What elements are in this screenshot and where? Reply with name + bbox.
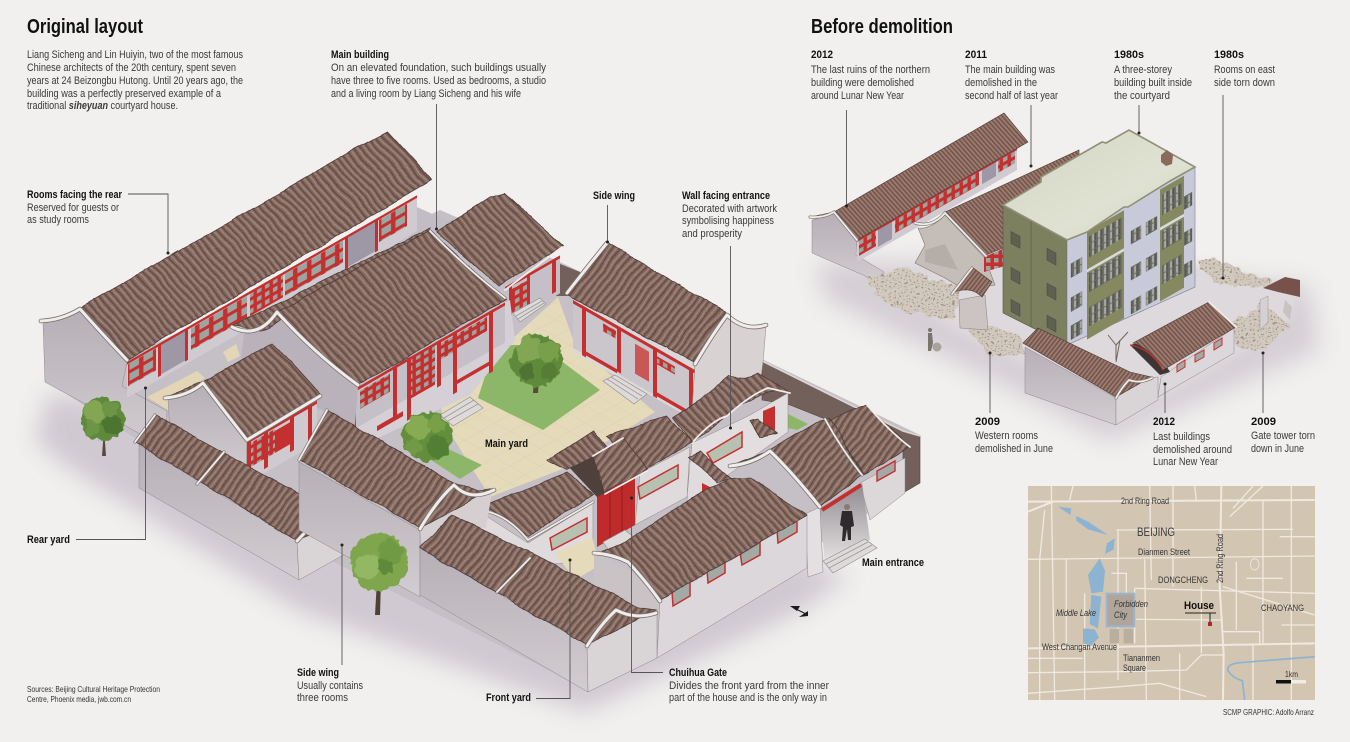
rooftop chimney — [1161, 150, 1173, 166]
callout: 1980s three-storey building: A three-storey — [1114, 64, 1172, 76]
tree: beside main yard — [402, 411, 452, 461]
callout: side wing lower — [297, 544, 363, 704]
callout: main building — [331, 49, 546, 230]
main building left gable wall — [240, 314, 358, 425]
upper gate roof — [547, 430, 607, 470]
callout: rooms facing the rear: as study rooms — [27, 214, 89, 226]
gate shadow — [567, 455, 605, 497]
callout: front yard: Front yard — [486, 692, 531, 704]
panel: before demolition illustration — [810, 113, 1320, 442]
brown boundary wall — [555, 262, 920, 493]
building: east side wing — [567, 242, 766, 420]
map labels: 2nd Ring Road — [1121, 496, 1169, 507]
middle hall gable wall — [168, 385, 247, 478]
small lawn behind gate — [788, 414, 808, 430]
map labels: BEIJING — [1137, 525, 1175, 539]
callout: 2009 western rooms: 2009 — [975, 416, 1000, 428]
panel: locator map of Beijing — [1028, 486, 1315, 700]
callout: 2012 last buildings — [1153, 382, 1232, 468]
dark side roof — [688, 452, 730, 482]
callout: 1980s east rooms: 1980s — [1214, 49, 1244, 61]
main building red windows — [984, 248, 1005, 272]
front hall roof — [594, 477, 807, 600]
callout: rooms facing the rear: Reserved for guests or — [27, 202, 119, 214]
screen wall roof — [673, 374, 790, 443]
main building back roof — [232, 228, 430, 330]
site ground — [885, 250, 1300, 425]
red gate door — [597, 473, 635, 547]
callout: 2012 northern ruins: 2012 — [811, 49, 833, 61]
west wing wall — [139, 445, 299, 580]
callout: 1980s three-storey building: 1980s — [1114, 49, 1144, 61]
callout: 1980s three-storey building: the courtyard — [1114, 90, 1170, 102]
ground shadow — [34, 392, 850, 712]
callout: 2012 last buildings: Last buildings — [1153, 431, 1210, 443]
text: introduction: building was a perfectly preserved example of a — [27, 88, 222, 100]
map labels: Middle Lake — [1056, 608, 1096, 619]
callout: 1980s east rooms: side torn down — [1214, 77, 1275, 89]
collapsed dark interior — [1130, 340, 1170, 375]
side wing platform — [573, 298, 695, 412]
tree: outside side wing — [350, 533, 408, 615]
centre gate roof — [593, 438, 647, 493]
rear entrance roof — [830, 405, 910, 475]
eastern rear wall — [408, 203, 457, 252]
side wing facade — [573, 300, 695, 420]
ground shadow — [815, 260, 1320, 442]
callout: 2009 western rooms: demolished in June — [975, 443, 1053, 455]
callout: side wing lower: three rooms — [297, 692, 348, 704]
east wing facade — [505, 255, 560, 325]
callout: rear yard: Rear yard — [27, 534, 70, 546]
callout: main building: Main building — [331, 49, 389, 61]
text: sources: Centre, Phoenix media, jwb.com.cn — [27, 694, 131, 704]
bare trees — [1108, 332, 1128, 362]
red inner door — [702, 483, 712, 500]
side wing gable wall — [692, 316, 766, 420]
main building facade — [352, 302, 505, 452]
west wing end wall — [297, 510, 347, 580]
credit: SCMP GRAPHIC: Adolfo Arranz — [1223, 707, 1314, 717]
icon: north arrows — [790, 606, 808, 617]
lawn: main yard — [478, 345, 600, 430]
compound base — [45, 210, 920, 690]
building: Chuihua Gate — [478, 415, 730, 565]
building: middle rear hall — [165, 343, 320, 483]
map labels: Forbidden — [1114, 599, 1148, 610]
bare doors in gable — [925, 244, 958, 270]
callout: 2011 main building: 2011 — [965, 49, 987, 61]
screen wall — [687, 393, 788, 497]
callout: rear yard — [27, 386, 147, 546]
callout: 2012 northern ruins: around Lunar New Year — [811, 90, 904, 102]
callout: 2009 western rooms: Western rooms — [975, 430, 1038, 442]
main building stairs — [440, 397, 483, 426]
ruin roof — [810, 113, 1028, 240]
main building roof — [945, 150, 1079, 255]
person at entrance — [840, 504, 854, 541]
building: rooms facing the rear — [41, 132, 432, 448]
callout: 2012 last buildings: demolished around — [1153, 444, 1232, 456]
flat roof — [1003, 130, 1195, 240]
building: west wing — [135, 415, 347, 580]
building: main entrance wings — [730, 405, 910, 577]
last hall wall — [1158, 328, 1234, 397]
entrance right wall — [860, 458, 905, 520]
front hall gable wall — [594, 555, 660, 655]
map labels: Tiananmen — [1123, 653, 1160, 664]
front yard floor — [555, 537, 600, 580]
front hall wall — [657, 515, 807, 658]
south wing roof — [420, 515, 657, 645]
entrance beam — [822, 485, 861, 510]
map labels: 1km — [1285, 669, 1298, 679]
south wing end wall — [587, 608, 657, 692]
front hall windows — [672, 520, 797, 606]
broken main building gable — [915, 215, 995, 290]
Forbidden City — [1107, 594, 1134, 626]
callout: wall facing entrance — [682, 190, 777, 430]
east wing stairs — [513, 298, 546, 322]
block lavender front — [1067, 167, 1195, 345]
main yard floor — [440, 297, 655, 497]
entrance frame — [805, 507, 823, 577]
west wing roof — [135, 415, 347, 540]
east wing roof — [437, 193, 563, 286]
side wing stairs — [603, 375, 647, 404]
callout: main building: and a living room by Liang Sicheng and his wife — [331, 88, 521, 100]
gate steps — [603, 530, 635, 552]
front entrance roof — [730, 418, 862, 507]
building: main building — [232, 228, 515, 452]
marker: house location — [1185, 613, 1216, 626]
callout: 1980s three-storey building — [1114, 49, 1192, 134]
map labels: West Changan Avenue — [1042, 642, 1117, 653]
rear building facade — [127, 195, 417, 398]
building: small roof behind main building — [437, 193, 563, 325]
text: introduction — [27, 49, 243, 112]
red door — [763, 406, 775, 436]
callout: rooms facing the rear: Rooms facing the rear — [27, 189, 123, 201]
last hall roof — [1133, 302, 1236, 370]
callout: 2011 main building: demolished in the — [965, 77, 1037, 89]
callout: Chuihua Gate: Chuihua Gate — [669, 667, 727, 679]
side wing roof — [299, 410, 494, 528]
title: original layout: Original layout — [27, 16, 143, 38]
callout: 2009 gate tower: down in June — [1251, 443, 1304, 455]
map roads and water — [1028, 486, 1315, 700]
callout: 2011 main building: The main building was — [965, 64, 1055, 76]
small connecting roof — [750, 418, 777, 437]
ruin facade — [857, 148, 1017, 262]
rear building roof — [41, 132, 432, 360]
callout: 1980s east rooms: Rooms on east — [1214, 64, 1275, 76]
artwork panel — [707, 432, 742, 463]
rear yard floor — [147, 344, 240, 410]
callout: 2012 last buildings: Lunar New Year — [1153, 456, 1218, 468]
gate tower fragment — [1260, 277, 1300, 330]
panel: original layout illustration — [34, 132, 920, 712]
text: sources: Sources: Beijing Cultural Heritage Protection — [27, 684, 160, 694]
building: collapsed gate fragment — [952, 267, 992, 330]
map land — [1028, 486, 1315, 700]
title: before demolition: Before demolition — [811, 16, 953, 38]
callout: side wing upper: Side wing — [593, 190, 635, 202]
gate right artwork panel — [638, 465, 678, 499]
callout: Chuihua Gate: part of the house and is the only way in — [669, 692, 827, 704]
callout: main building: have three to five rooms. Used as bedrooms, a studio — [331, 75, 546, 87]
entrance opening — [820, 483, 870, 566]
building: demolished main building — [915, 150, 1079, 290]
building: surviving front wall — [1023, 328, 1158, 425]
ruin west wall — [812, 214, 884, 284]
map labels: 2nd Ring Road — [1215, 534, 1226, 583]
callout: 2012 northern ruins: The last ruins of the northern — [811, 64, 930, 76]
building: last northern ruins — [810, 113, 1028, 284]
callout: 2011 main building: second half of last year — [965, 90, 1058, 102]
building: south wing — [420, 515, 657, 692]
building: three-storey block — [1003, 130, 1195, 349]
map labels: House — [1184, 600, 1214, 612]
main building platform — [352, 300, 515, 438]
callout: rooms facing the rear — [27, 189, 170, 254]
text: sources — [27, 684, 160, 704]
tree: rear yard — [81, 397, 125, 456]
front wall roof — [1023, 328, 1151, 397]
right gate roof — [607, 415, 692, 473]
callout: front yard — [486, 558, 572, 704]
callout: wall facing entrance: and prosperity — [682, 228, 742, 240]
callout: 2009 gate tower: 2009 — [1251, 416, 1276, 428]
callout: 2009 gate tower: Gate tower torn — [1251, 430, 1315, 442]
text: introduction: Chinese architects of the 20th century, spent seven — [27, 62, 236, 74]
building: wall facing entrance — [673, 374, 790, 497]
map labels: City — [1114, 610, 1128, 621]
side wing wall — [299, 462, 420, 597]
callout: 2009 gate tower — [1251, 352, 1315, 455]
callout: wall facing entrance: Decorated with artwork — [682, 203, 777, 215]
building: front long hall — [594, 477, 807, 658]
map labels: Dianmen Street — [1138, 547, 1190, 558]
callout: 2012 northern ruins: building were demolished — [811, 77, 914, 89]
callout: wall facing entrance: Wall facing entrance — [682, 190, 770, 202]
lawn: beside main yard tree — [428, 445, 482, 479]
callout: Chuihua Gate — [630, 496, 829, 704]
callout: 1980s three-storey building: building built inside — [1114, 77, 1192, 89]
gate right wall — [635, 447, 690, 525]
gate left artwork panel — [550, 518, 587, 550]
gate left wall — [480, 503, 593, 565]
callout: main building: On an elevated foundation, such buildings usually — [331, 62, 546, 74]
map labels: DONGCHENG — [1158, 575, 1208, 586]
block olive side — [1003, 205, 1067, 345]
map labels: Square — [1123, 663, 1146, 674]
callout: 2012 northern ruins — [811, 49, 930, 208]
tree: main yard — [511, 334, 563, 393]
front wall face — [1025, 347, 1116, 425]
text: introduction: traditional siheyuan courtyard house. — [27, 100, 178, 112]
callout: side wing upper — [593, 190, 635, 244]
person with wheelbarrow — [928, 328, 942, 352]
middle hall facade — [247, 401, 317, 483]
balcony bays — [1087, 176, 1184, 344]
middle hall roof — [165, 343, 320, 440]
text: introduction: Liang Sicheng and Lin Huiyin, two of the most famous — [27, 49, 243, 61]
label: main yard: Main yard — [485, 438, 528, 450]
block small windows — [1071, 192, 1192, 349]
label: main entrance: Main entrance — [862, 557, 924, 569]
building: inner wall of side wing — [299, 410, 494, 597]
south wing wall — [420, 548, 588, 692]
map labels: CHAOYANG — [1261, 603, 1304, 614]
left gate roof — [478, 473, 593, 538]
rear gable wall — [43, 310, 167, 448]
rubble piles — [866, 258, 1290, 356]
side wing gable — [420, 486, 492, 552]
main building roof — [277, 230, 505, 385]
callout: 2011 main building — [965, 49, 1058, 168]
text: introduction: years at 24 Beizongbu Hutong. Until 20 years ago, the — [27, 75, 243, 87]
callout: wall facing entrance: symbolising happiness — [682, 215, 774, 227]
callout: 1980s east rooms — [1214, 49, 1275, 280]
side wing roof — [567, 242, 727, 363]
entrance side window — [877, 461, 895, 481]
map labels — [1042, 496, 1304, 679]
callout: side wing lower: Side wing — [297, 667, 339, 679]
callout: Chuihua Gate: Divides the front yard from the inner — [669, 680, 829, 692]
building: last standing hall — [1130, 302, 1236, 397]
callout: side wing lower: Usually contains — [297, 680, 363, 692]
callout: 2012 last buildings: 2012 — [1153, 416, 1175, 428]
entrance stairs — [823, 539, 877, 573]
callout: 2009 western rooms — [975, 352, 1053, 455]
scale bar — [1276, 680, 1306, 684]
